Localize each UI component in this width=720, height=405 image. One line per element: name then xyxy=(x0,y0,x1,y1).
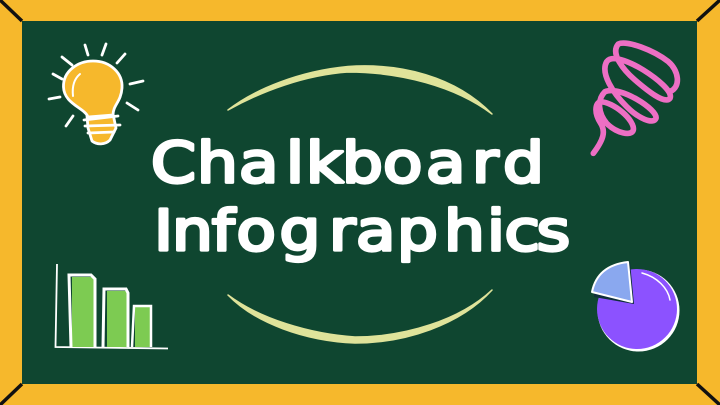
chart axes xyxy=(56,264,168,348)
title line 2: Infographics xyxy=(154,199,570,264)
bar 1 xyxy=(69,275,95,347)
title xyxy=(151,131,570,264)
icon: pink scribble xyxy=(593,43,677,153)
bottom chalk arc xyxy=(228,290,492,343)
bulb glass xyxy=(63,61,122,117)
icon: light bulb xyxy=(49,44,143,144)
pie slice xyxy=(592,262,632,302)
pie slice shadow xyxy=(594,262,634,304)
bulb base xyxy=(87,114,116,144)
bar 2 xyxy=(103,289,128,347)
title line 1: Chalkboard xyxy=(151,131,544,196)
icon: bar chart xyxy=(56,264,168,348)
icon: pie chart xyxy=(592,262,680,352)
top chalk arc xyxy=(228,66,492,114)
bar 3 xyxy=(132,306,151,347)
pie body xyxy=(598,270,680,352)
bulb rays xyxy=(49,44,143,126)
